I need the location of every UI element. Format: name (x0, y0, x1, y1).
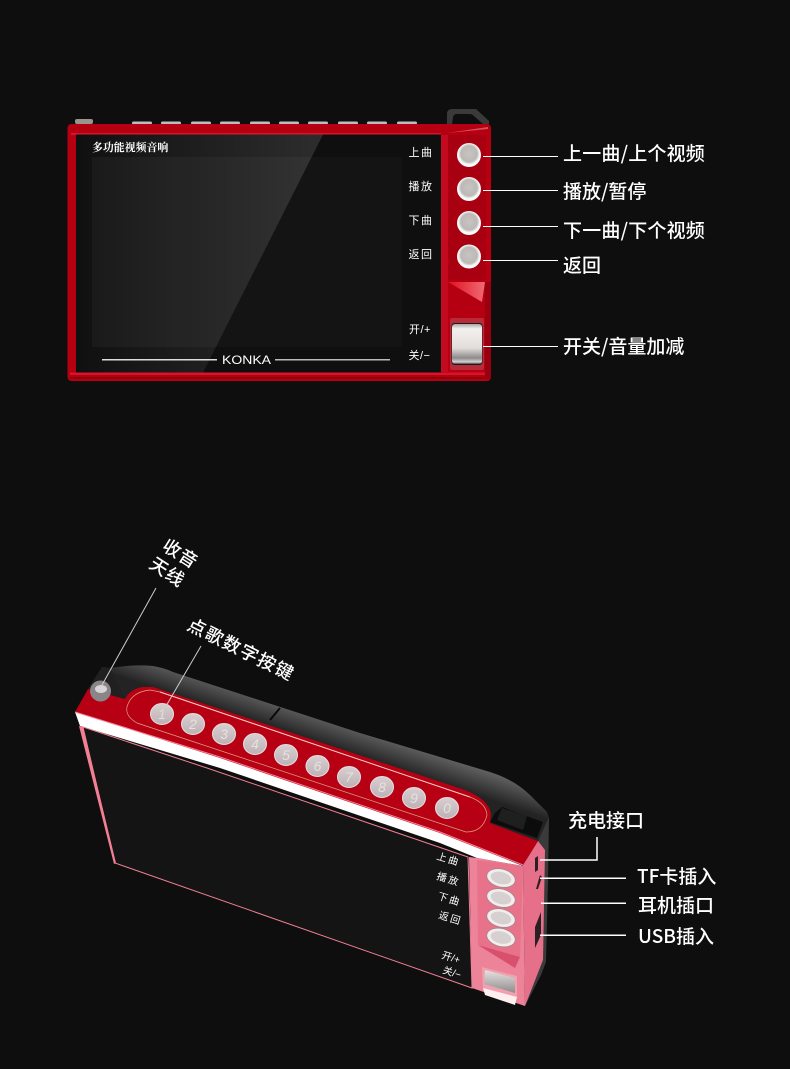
angled screen labels: 上曲 (435, 850, 462, 869)
red top plane (75, 687, 538, 865)
white front edge (75, 712, 523, 866)
callout: number keys (162, 611, 300, 713)
screen button labels: 下曲 (408, 214, 434, 227)
callouts: front view: 开关/音量加减 (563, 332, 684, 359)
angled screen labels: 开/+ (440, 950, 461, 966)
inner button panel (477, 860, 523, 968)
key digits: 9 (410, 790, 418, 806)
icon: top handle (447, 109, 489, 124)
brand line with KONKA: KONKA (222, 355, 271, 367)
callout: charging port: 充电接口 (568, 806, 644, 833)
screen button labels (408, 146, 434, 362)
angled screen labels: 下曲 (436, 890, 463, 909)
angled screen labels: 返回 (437, 909, 464, 928)
volume wheel (450, 318, 484, 370)
callout: USB: USB插入 (638, 922, 714, 949)
callouts: front view: 上一曲/上个视频 (563, 139, 705, 166)
dark wedge by antenna (88, 667, 125, 699)
screen button labels: 关/− (408, 348, 430, 362)
right button panel (448, 135, 486, 280)
key digits: 5 (282, 747, 290, 763)
callout: headphone: 耳机插口 (638, 891, 714, 918)
key digits: 1 (158, 706, 166, 722)
angled screen labels: 播放 (435, 869, 462, 889)
key digits: 0 (443, 800, 451, 816)
callouts: front view: 播放/暂停 (563, 177, 646, 204)
callouts: front view (483, 139, 705, 359)
callout: number keys: 点歌数字按键 (183, 611, 300, 687)
angled volume wheel (482, 967, 517, 1005)
key digits: 4 (251, 736, 259, 752)
screen button labels: 上曲 (408, 146, 434, 159)
key digits: 7 (345, 769, 354, 785)
antenna knob (90, 680, 111, 702)
angled screen labels (435, 850, 464, 981)
device body (68, 124, 491, 381)
key digits (158, 706, 451, 816)
side panel (523, 841, 545, 1006)
screen button labels: 开/+ (409, 324, 431, 336)
angled button centres (489, 870, 513, 946)
round buttons (457, 143, 481, 268)
pill outline (127, 690, 487, 832)
callouts: front view: 下一曲/下个视频 (563, 216, 705, 243)
device title: 多功能视频音响 (92, 140, 168, 154)
panel: front view device (68, 109, 491, 381)
callout: TF card: TF卡插入 (637, 862, 716, 889)
angled buttons (485, 866, 517, 950)
key digits: 3 (220, 726, 228, 742)
display area (92, 157, 402, 347)
side edge (525, 817, 549, 1006)
screen button labels: 返回 (408, 248, 434, 261)
seam (270, 708, 280, 720)
callout: antenna (102, 532, 204, 685)
callout: charging port (540, 806, 644, 860)
screen glass (76, 134, 441, 372)
glass reflection (76, 134, 323, 372)
charging handle (490, 807, 543, 838)
callout: antenna: 天线 (145, 550, 191, 593)
left screen edge (79, 726, 116, 864)
key digits: 6 (314, 758, 322, 774)
icon: top number key edges (75, 119, 417, 124)
screen (83, 727, 472, 988)
numeric keys (150, 704, 458, 818)
key digits: 8 (378, 779, 386, 795)
panel: angled view device (75, 665, 549, 1006)
callouts: front view: 返回 (563, 251, 601, 278)
screen button labels: 播放 (408, 179, 434, 193)
accent triangle (448, 282, 485, 302)
pink control strip (469, 857, 525, 1006)
callout: antenna: 收音 (158, 532, 204, 574)
side ports (535, 856, 542, 948)
key digits: 2 (188, 716, 197, 732)
black rear shell (88, 665, 549, 860)
angled screen labels: 关/− (441, 963, 463, 981)
